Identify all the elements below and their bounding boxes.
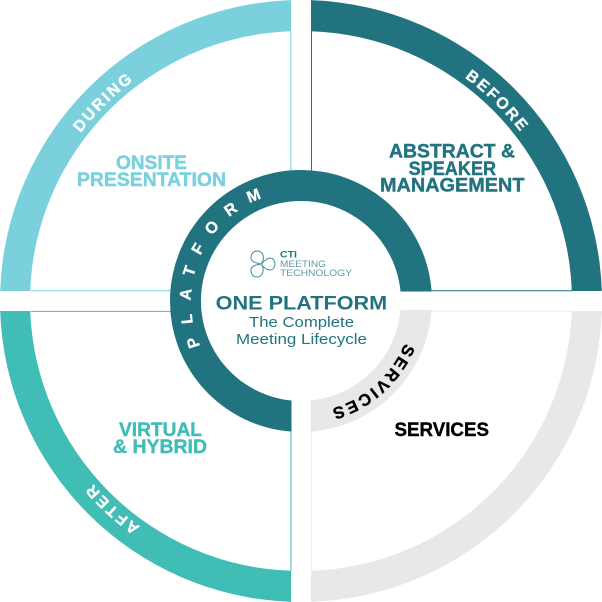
centre subheading bbox=[236, 314, 367, 348]
before heading bbox=[380, 142, 525, 197]
services heading: SERVICES bbox=[394, 420, 489, 441]
centre subheading: Meeting Lifecycle bbox=[236, 331, 367, 348]
services inner arc band bbox=[311, 310, 432, 432]
after heading: VIRTUAL bbox=[119, 420, 202, 441]
centre heading: ONE PLATFORM bbox=[216, 293, 387, 314]
platform ring bbox=[170, 170, 432, 432]
logo wordmark bbox=[280, 250, 353, 279]
after heading bbox=[113, 420, 207, 458]
panel: during quadrant bbox=[0, 0, 292, 292]
centre content bbox=[216, 250, 387, 348]
before heading: MANAGEMENT bbox=[380, 176, 525, 197]
during arc band bbox=[0, 0, 291, 291]
panel: services quadrant bbox=[311, 310, 602, 602]
after arc band bbox=[0, 311, 291, 602]
platform curved label: PLATFORM bbox=[180, 188, 261, 349]
before arc band bbox=[311, 0, 602, 291]
before curved label: BEFORE bbox=[465, 69, 528, 132]
during heading: PRESENTATION bbox=[77, 170, 226, 191]
before heading: ABSTRACT & bbox=[389, 142, 515, 163]
before heading: SPEAKER bbox=[409, 159, 496, 180]
logo wordmark: MEETING bbox=[280, 259, 326, 270]
panel: after quadrant bbox=[0, 310, 292, 602]
during heading bbox=[77, 153, 226, 191]
during heading: ONSITE bbox=[116, 153, 187, 174]
after curved label: AFTER bbox=[86, 484, 140, 533]
panel: before quadrant bbox=[311, 0, 602, 292]
logo wordmark: CTI bbox=[280, 250, 297, 261]
services quadrant outline bbox=[312, 311, 572, 571]
after quadrant outline bbox=[31, 311, 291, 571]
services curved label: SERVICES bbox=[333, 344, 414, 419]
platform ring band bbox=[170, 170, 432, 432]
before quadrant outline bbox=[312, 31, 572, 291]
logo wordmark: TECHNOLOGY bbox=[280, 268, 353, 279]
centre subheading: The Complete bbox=[249, 314, 354, 331]
icon: CTI trefoil logo bbox=[251, 251, 275, 277]
after heading: & HYBRID bbox=[113, 437, 207, 458]
services outer arc band bbox=[311, 311, 602, 602]
during curved label: DURING bbox=[72, 74, 132, 132]
during quadrant outline bbox=[31, 31, 291, 291]
